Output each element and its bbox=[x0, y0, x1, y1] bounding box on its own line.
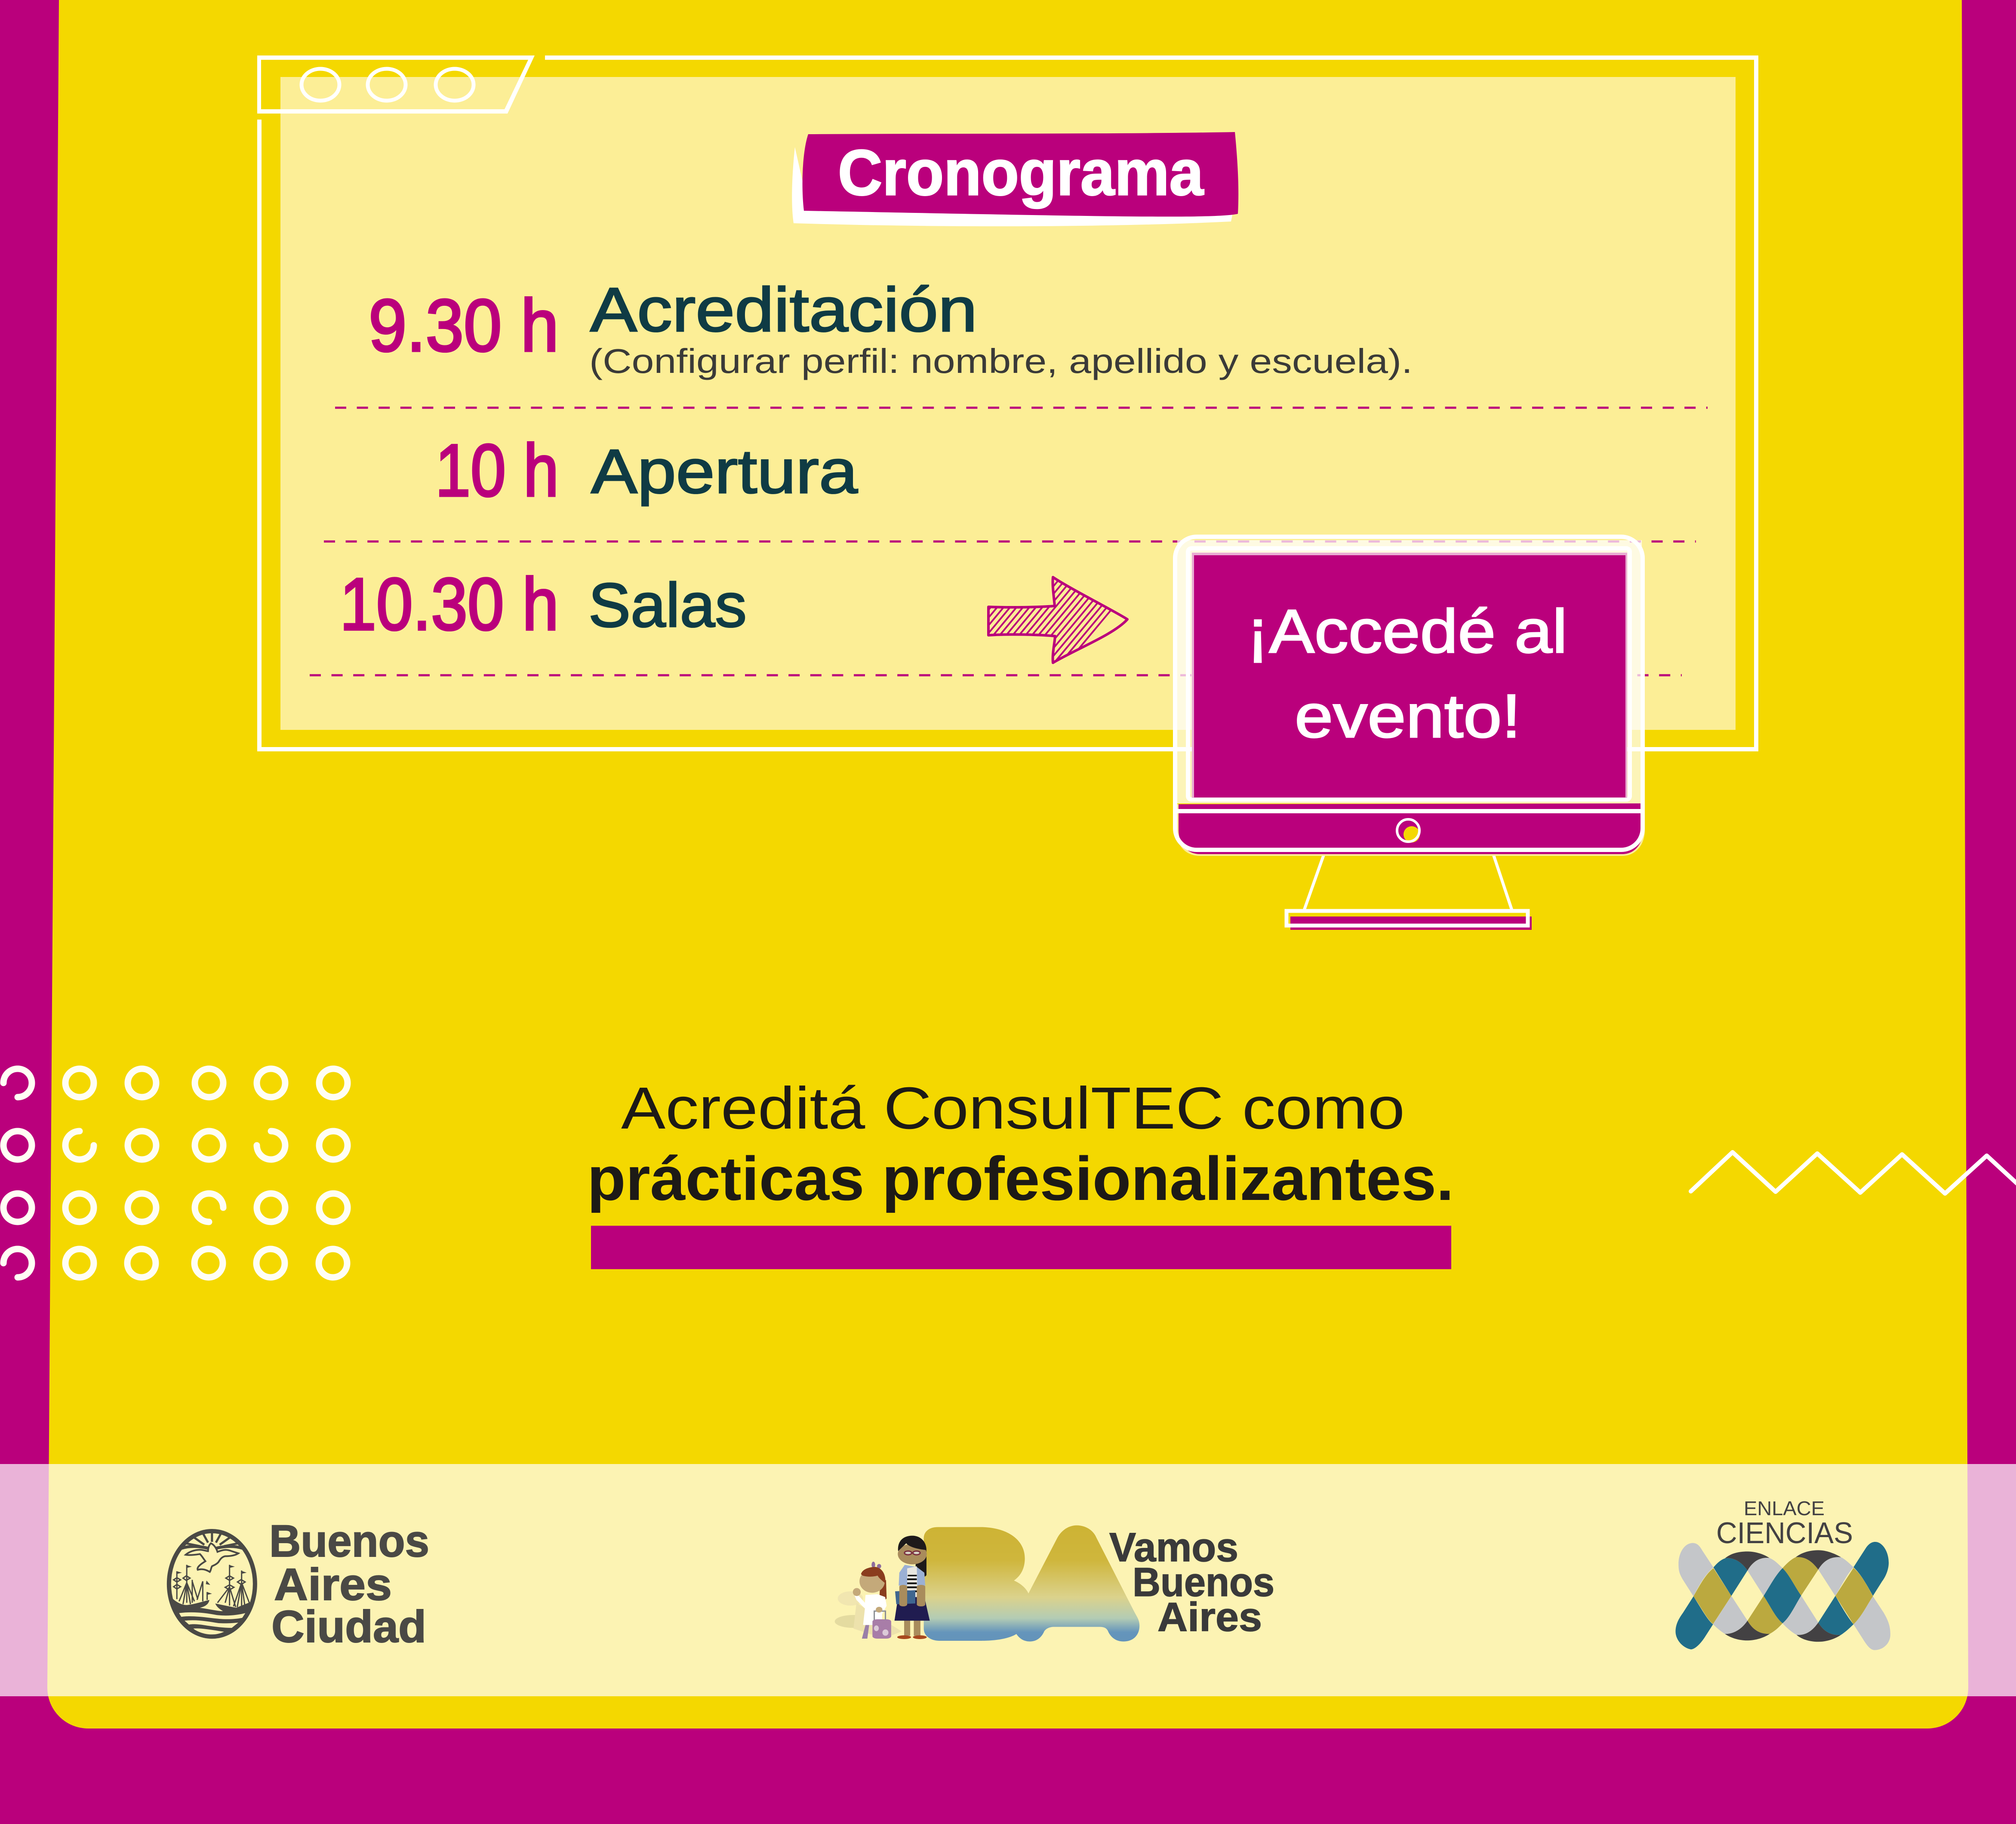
monitor screen: ¡Accedé al bbox=[1247, 597, 1567, 666]
arrow: sketched pointing right bbox=[987, 576, 1129, 664]
monitor screen: evento! bbox=[1295, 682, 1521, 751]
decoration: ring dots bbox=[3, 1069, 348, 1277]
browser tab with three circles bbox=[257, 55, 535, 114]
row: 10 h Apertura: 10 h bbox=[435, 429, 559, 512]
logo wordmark: Aires bbox=[274, 1559, 392, 1610]
row: 10.30 h Salas: Salas bbox=[588, 570, 747, 640]
logo wordmark bbox=[1716, 1497, 1853, 1550]
logo wordmark: Ciudad bbox=[271, 1602, 426, 1652]
panel: schedule background bbox=[280, 77, 1736, 730]
heading: Cronograma bbox=[792, 132, 1238, 226]
logo wordmark: Buenos bbox=[1133, 1559, 1274, 1605]
logo helix bbox=[1675, 1542, 1890, 1650]
logo: Buenos Aires Ciudad bbox=[167, 1525, 428, 1643]
text: practicas profesionalizantes message: prácticas profesionalizantes. bbox=[587, 1144, 1454, 1213]
logo wordmark: CIENCIAS bbox=[1716, 1516, 1853, 1550]
illustration: woman teacher bbox=[895, 1536, 930, 1639]
logo wordmark: ENLACE bbox=[1744, 1497, 1825, 1519]
logo wordmark: Vamos bbox=[1109, 1525, 1238, 1570]
monitor: access the event bbox=[1175, 537, 1645, 930]
row: 9.30 h Acreditación: Acreditación bbox=[590, 275, 977, 344]
logo seal bbox=[164, 1531, 260, 1640]
text: practicas profesionalizantes message bbox=[587, 1075, 1454, 1213]
heading: Cronograma: Cronograma bbox=[838, 136, 1204, 209]
logo wordmark bbox=[1109, 1525, 1274, 1640]
monitor body bbox=[1175, 537, 1645, 856]
logo: Enlace Ciencias bbox=[1675, 1497, 1890, 1650]
text: practicas profesionalizantes message: Acreditá ConsulTEC como bbox=[621, 1075, 1405, 1141]
decoration: zigzag line bbox=[1691, 1152, 2016, 1196]
logo wordmark: Buenos bbox=[269, 1516, 429, 1566]
schedule frame bbox=[259, 58, 1756, 749]
monitor stand bbox=[1287, 851, 1532, 930]
monitor power button bbox=[1397, 819, 1420, 843]
highlight bar bbox=[591, 1226, 1451, 1269]
logo wordmark bbox=[269, 1516, 429, 1652]
row: 9.30 h Acreditación: 9.30 h bbox=[369, 284, 559, 367]
row: 10.30 h Salas bbox=[340, 563, 747, 646]
footer band bbox=[0, 1464, 2016, 1696]
row: 10 h Apertura: Apertura bbox=[591, 437, 858, 506]
illustration: girl scientist bbox=[835, 1562, 902, 1639]
row: 9.30 h Acreditación bbox=[369, 275, 1413, 380]
row: 9.30 h Acreditación: (Configurar perfil: nombre, apellido y escuela). bbox=[589, 342, 1413, 380]
logo: Vamos Buenos Aires bbox=[835, 1525, 1274, 1642]
row: 10 h Apertura bbox=[435, 429, 858, 512]
BA letters bbox=[924, 1526, 1139, 1642]
logo wordmark: Aires bbox=[1157, 1594, 1262, 1640]
monitor screen bbox=[1188, 548, 1630, 800]
row: 10.30 h Salas: 10.30 h bbox=[340, 563, 559, 646]
